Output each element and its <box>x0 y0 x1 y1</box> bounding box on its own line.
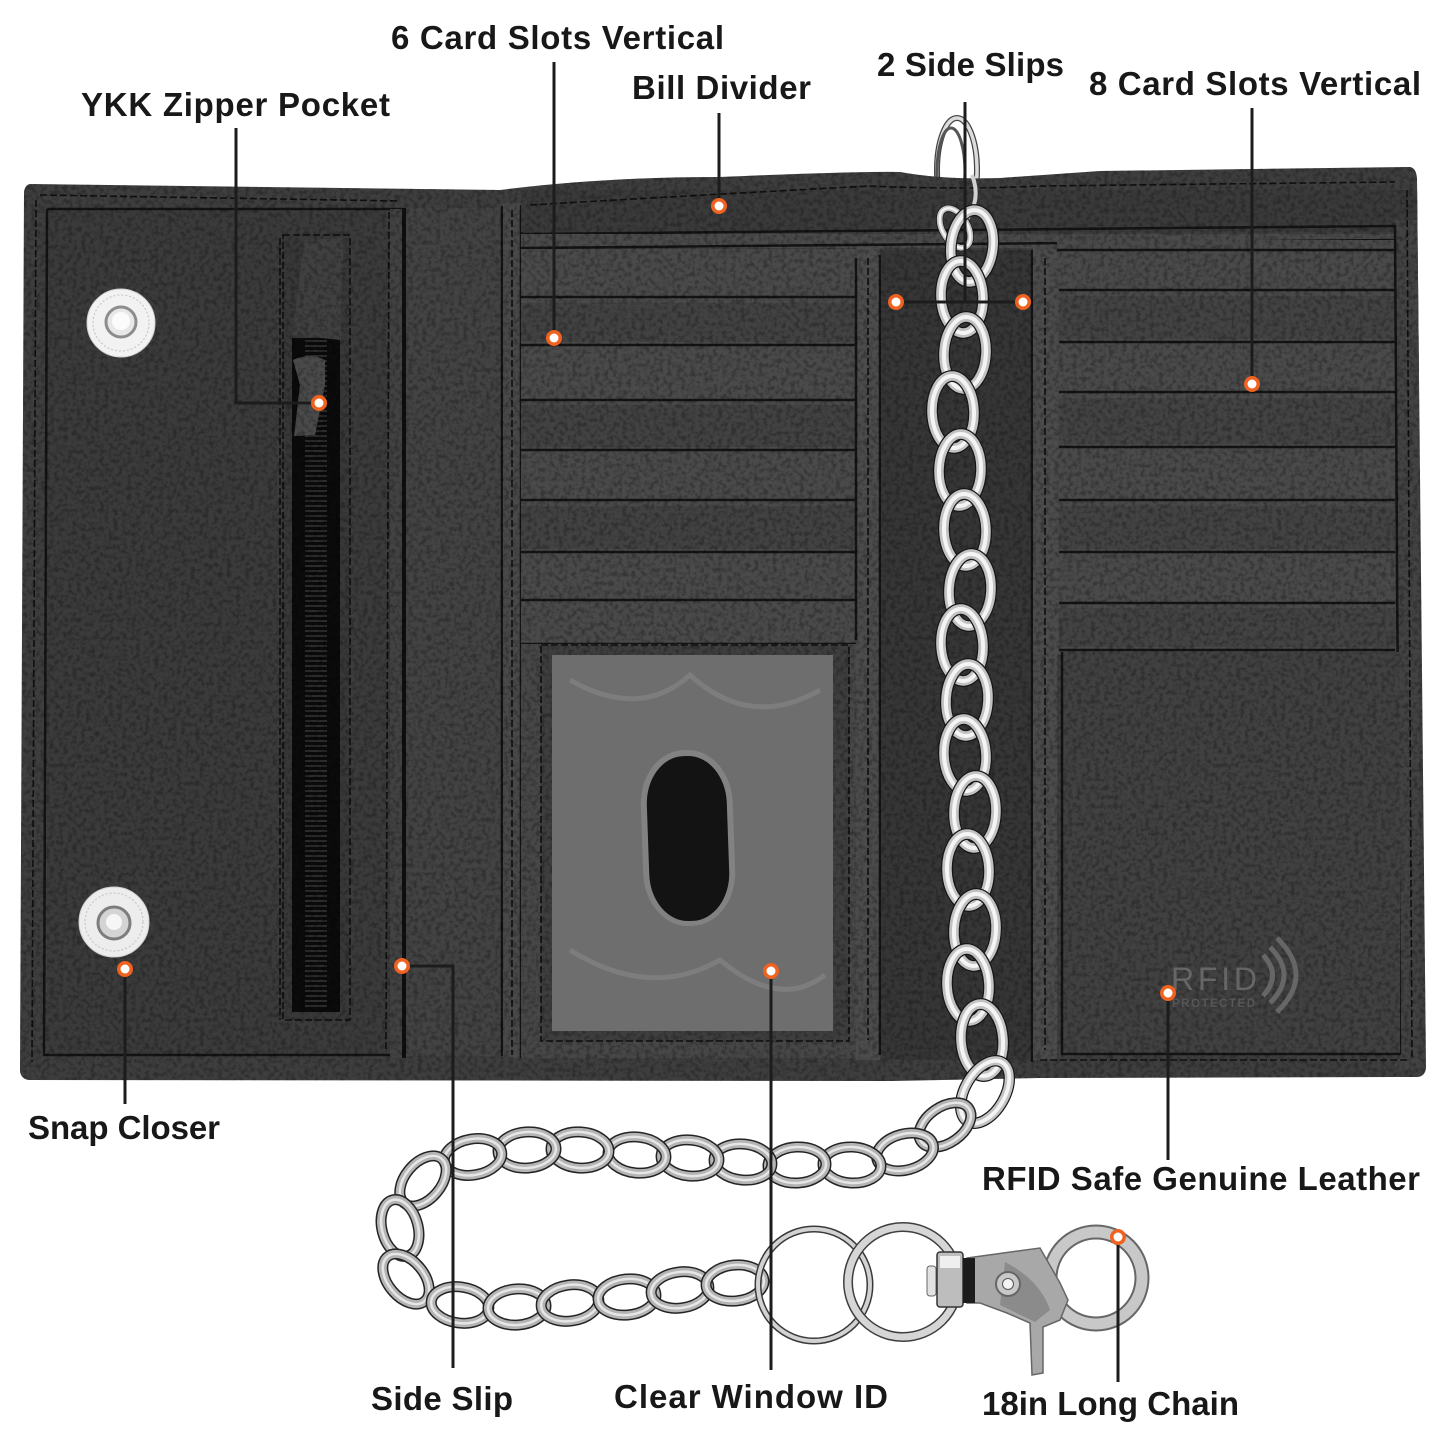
callout: Clear Window ID <box>614 963 888 1415</box>
panel: lower pocket around ID window <box>521 644 856 1058</box>
callout: RFID Safe Genuine Leather <box>982 985 1420 1197</box>
icon: key ring behind wallet <box>937 118 977 222</box>
panel: RFID leather pocket <box>1040 652 1410 1060</box>
callout: 18in Long Chain: 18in Long Chain <box>982 1385 1239 1422</box>
callout: Snap Closer: Snap Closer <box>28 1109 220 1146</box>
callout: 6 Card Slots Vertical: 6 Card Slots Vertical <box>391 19 724 56</box>
callout: Side Slip <box>371 958 513 1417</box>
lower horizontal chain links <box>429 1262 766 1327</box>
callout: Clear Window ID: Clear Window ID <box>614 1378 888 1415</box>
icon: RFID protected emboss: RFID <box>1171 961 1257 997</box>
panel: zipper pocket <box>283 235 350 1020</box>
icon: swivel clasp with rings <box>758 1227 1142 1375</box>
panel: eight card slots <box>1057 190 1419 1070</box>
vertical chain links <box>931 203 1019 1132</box>
callout: 8 Card Slots Vertical: 8 Card Slots Vertical <box>1089 65 1421 102</box>
panel: clear ID window <box>552 655 833 1031</box>
panel: centre spine <box>881 248 1057 1062</box>
upper horizontal chain links <box>374 1094 979 1313</box>
callout: 8 Card Slots Vertical <box>1089 65 1421 392</box>
panel: side slip <box>500 203 522 1058</box>
leather grain <box>0 160 1445 1090</box>
icon: window cutout <box>639 748 737 928</box>
callout: YKK Zipper Pocket <box>81 86 390 411</box>
callout: 2 Side Slips <box>877 46 1064 310</box>
icon: top snap <box>87 289 155 357</box>
callout: RFID Safe Genuine Leather: RFID Safe Genuine Leather <box>982 1160 1420 1197</box>
callout: Snap Closer <box>28 961 220 1146</box>
callout: Bill Divider: Bill Divider <box>632 69 811 106</box>
callout: 6 Card Slots Vertical <box>391 19 724 346</box>
icon: RFID protected emboss: PROTECTED <box>1172 998 1255 1010</box>
icon: bottom snap <box>79 887 149 957</box>
callout: 2 Side Slips: 2 Side Slips <box>877 46 1064 83</box>
panel: left flap with snaps <box>32 195 406 1062</box>
panel: bill divider top band <box>521 182 1421 248</box>
chain <box>374 175 1019 1327</box>
wallet <box>0 160 1445 1090</box>
callout: Bill Divider <box>632 69 811 214</box>
key ring front arc <box>965 175 976 222</box>
callout: YKK Zipper Pocket: YKK Zipper Pocket <box>81 86 390 123</box>
callout: Side Slip: Side Slip <box>371 1380 513 1417</box>
panel: six card slots <box>521 248 880 1060</box>
icon: RFID protected emboss <box>1171 938 1296 1012</box>
callout: 18in Long Chain <box>982 1229 1239 1422</box>
